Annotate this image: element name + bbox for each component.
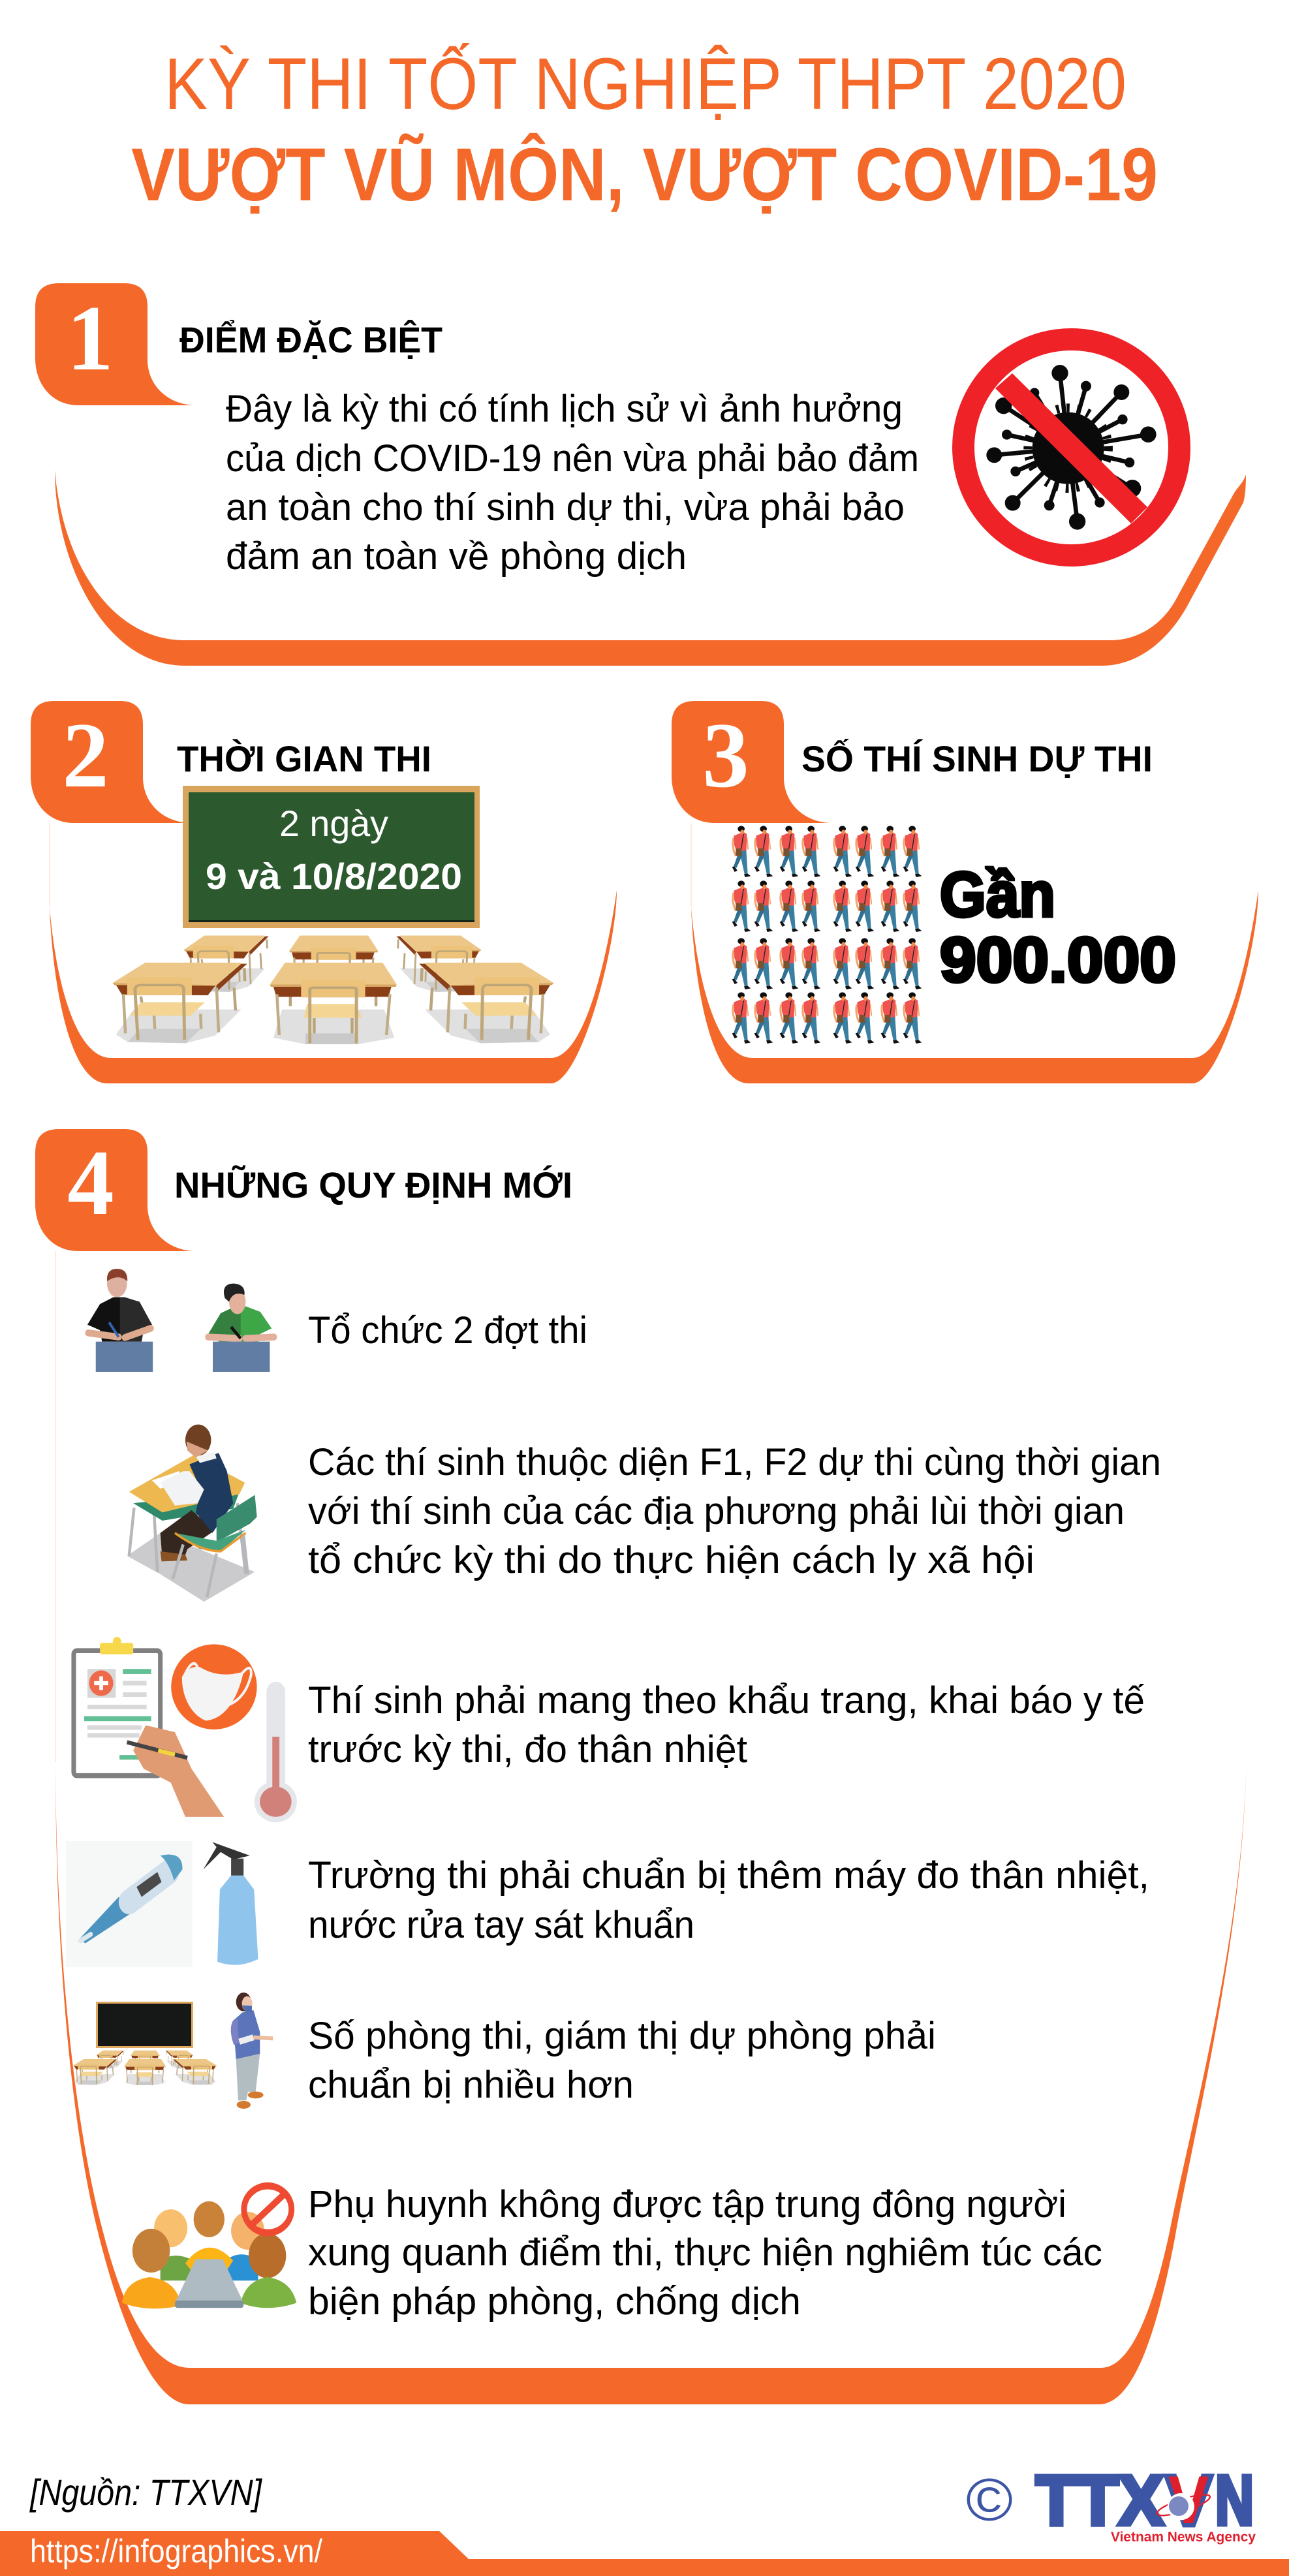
text block 1: an toàn cho thí sinh dự thi, vừa phải bảo xyxy=(226,486,905,529)
hairline left 3 xyxy=(691,824,692,907)
text block 1: của dịch COVID-19 nên vừa phải bảo đảm xyxy=(226,437,919,480)
logo: TTXVN: V xyxy=(1168,2462,1209,2538)
title: VƯỢT VŨ MÔN, VƯỢT COVID-19 xyxy=(131,132,1158,217)
badge 4 xyxy=(35,1129,194,1251)
badge 1: 1 xyxy=(67,287,114,390)
text: phụ huynh: Phụ huynh không được tập trung đông người xyxy=(308,2183,1066,2226)
footer bar with url: https://infographics.vn/ xyxy=(30,2533,322,2569)
text: phụ huynh xyxy=(308,2183,1102,2323)
icon: two exam takers xyxy=(87,1269,274,1372)
text block 1: Đây là kỳ thi có tính lịch sử vì ảnh hưởng xyxy=(226,388,903,430)
badge 1 xyxy=(35,283,194,405)
heading 1: ĐIỂM ĐẶC BIỆT xyxy=(179,319,443,360)
text: phòng thi dự phòng: Số phòng thi, giám thị dự phòng phải xyxy=(308,2015,936,2057)
icon: classroom and proctor xyxy=(73,1993,273,2109)
icon: clipboard, mask, thermometer xyxy=(74,1637,297,1822)
icon: crowd prohibited xyxy=(122,2186,296,2308)
heading 4: NHỮNG QUY ĐỊNH MỚI xyxy=(174,1164,572,1205)
text: khẩu trang xyxy=(308,1679,1145,1771)
figure: gần 900.000: 900.000 xyxy=(940,924,1176,995)
classroom desks xyxy=(112,935,553,1044)
icon: thermometer and spray bottle xyxy=(66,1841,258,1967)
logo: TTXVN: N xyxy=(1215,2460,1254,2539)
text: khẩu trang: Thí sinh phải mang theo khẩu trang, khai báo y tế xyxy=(308,1679,1145,1722)
icon: student at desk xyxy=(127,1425,257,1602)
text: máy đo thân nhiệt: nước rửa tay sát khuẩn xyxy=(308,1904,694,1946)
text: máy đo thân nhiệt: Trường thi phải chuẩn bị thêm máy đo thân nhiệt, xyxy=(308,1854,1149,1897)
panel swoosh 3 xyxy=(691,890,1258,1083)
badge 3 xyxy=(672,701,830,823)
text: F1 F2 xyxy=(308,1441,1161,1581)
badge 3: 3 xyxy=(702,704,749,807)
text: F1 F2: tổ chức kỳ thi do thực hiện cách ly xã hội xyxy=(308,1539,1034,1581)
text block 1 xyxy=(226,388,919,578)
title xyxy=(131,43,1158,217)
hairline left 2 xyxy=(49,824,50,907)
panel swoosh 4 xyxy=(55,1741,1247,2404)
copyright mark: © xyxy=(966,2467,1013,2534)
source: [Nguồn: TTXVN] xyxy=(29,2472,262,2513)
blackboard: 9 và 10/8/2020 xyxy=(206,856,462,897)
text: máy đo thân nhiệt xyxy=(308,1854,1149,1946)
logo: TTXVN: TTX xyxy=(1036,2460,1164,2539)
figure: gần 900.000 xyxy=(940,859,1176,995)
logo: TTXVN: V xyxy=(1164,2459,1214,2543)
hairline left 4 xyxy=(55,1251,56,1762)
blackboard xyxy=(183,786,480,928)
text: phòng thi dự phòng: chuẩn bị nhiều hơn xyxy=(308,2064,634,2106)
panel swoosh 1 xyxy=(55,470,1246,666)
text: F1 F2: với thí sinh của các địa phương phải lùi thời gian xyxy=(308,1490,1125,1532)
text block 1: đảm an toàn về phòng dịch xyxy=(226,535,687,578)
text: phòng thi dự phòng xyxy=(308,2015,936,2106)
text: F1 F2: Các thí sinh thuộc diện F1, F2 dự thi cùng thời gian xyxy=(308,1441,1161,1483)
badge 2 xyxy=(31,701,189,823)
text: phụ huynh: biện pháp phòng, chống dịch xyxy=(308,2280,801,2323)
heading 3: SỐ THÍ SINH DỰ THI xyxy=(801,738,1153,779)
badge 4: 4 xyxy=(67,1131,114,1234)
panel: điểm đặc biệt xyxy=(35,283,1246,666)
footer bar with url xyxy=(0,2531,1289,2576)
panel: số thí sinh dự thi xyxy=(672,701,1258,1083)
logo: TTXVN xyxy=(1036,2459,1256,2545)
text: khẩu trang: trước kỳ thi, đo thân nhiệt xyxy=(308,1728,747,1771)
logo: TTXVN: Vietnam News Agency xyxy=(1111,2530,1256,2545)
blackboard: 2 ngày xyxy=(279,803,388,844)
badge 2: 2 xyxy=(62,704,109,807)
panel: thời gian thi xyxy=(31,701,617,1083)
text: tổ chức 2 đợt thi: Tổ chức 2 đợt thi xyxy=(308,1309,587,1352)
people pictogram grid xyxy=(732,826,922,1044)
figure: gần 900.000: Gần xyxy=(940,859,1055,930)
title: KỲ THI TỐT NGHIỆP THPT 2020 xyxy=(164,43,1126,125)
text: phụ huynh: xung quanh điểm thi, thực hiện nghiêm túc các xyxy=(308,2231,1102,2274)
panel swoosh 2 xyxy=(50,890,617,1083)
icon: no virus sign xyxy=(963,339,1179,555)
panel: những quy định mới xyxy=(35,1129,1247,2404)
heading 2: THỜI GIAN THI xyxy=(177,738,431,779)
